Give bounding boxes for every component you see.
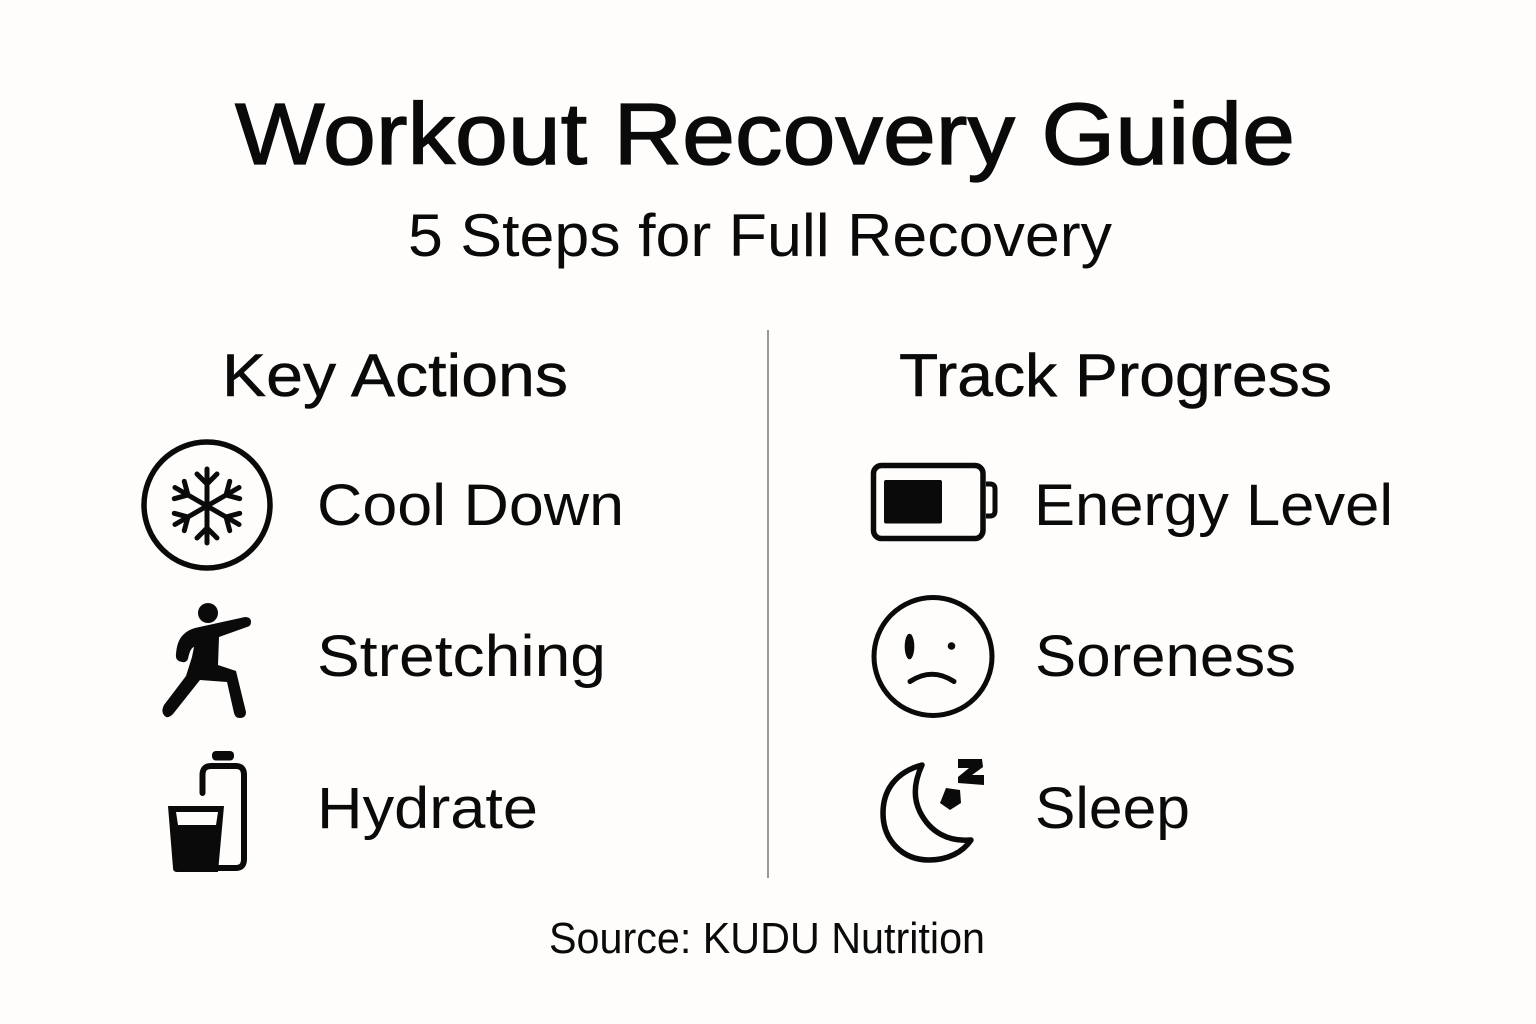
label: stretching: Stretching bbox=[317, 624, 606, 689]
label: hydrate: Hydrate bbox=[317, 776, 538, 841]
label: sleep: Sleep bbox=[1035, 776, 1190, 841]
center divider bbox=[767, 330, 769, 878]
icon: bottle and glass bbox=[168, 751, 244, 872]
subtitle: 5 Steps for Full Recovery bbox=[408, 202, 1112, 269]
icon: moon and z bbox=[883, 759, 984, 860]
label: soreness: Soreness bbox=[1035, 624, 1296, 689]
icon: battery bbox=[874, 466, 995, 538]
icon: snowflake in circle bbox=[144, 442, 270, 568]
source note: Source: KUDU Nutrition bbox=[549, 914, 985, 963]
label: cool down: Cool Down bbox=[317, 473, 624, 538]
title: Workout Recovery Guide bbox=[235, 86, 1295, 183]
panel: key actions bbox=[144, 342, 624, 872]
heading: key actions: Key Actions bbox=[222, 342, 568, 409]
icon: stretching figure bbox=[162, 603, 251, 718]
heading: track progress: Track Progress bbox=[899, 342, 1332, 409]
panel: track progress bbox=[874, 342, 1393, 860]
icon: sad face bbox=[874, 598, 992, 716]
label: energy level: Energy Level bbox=[1034, 473, 1393, 538]
